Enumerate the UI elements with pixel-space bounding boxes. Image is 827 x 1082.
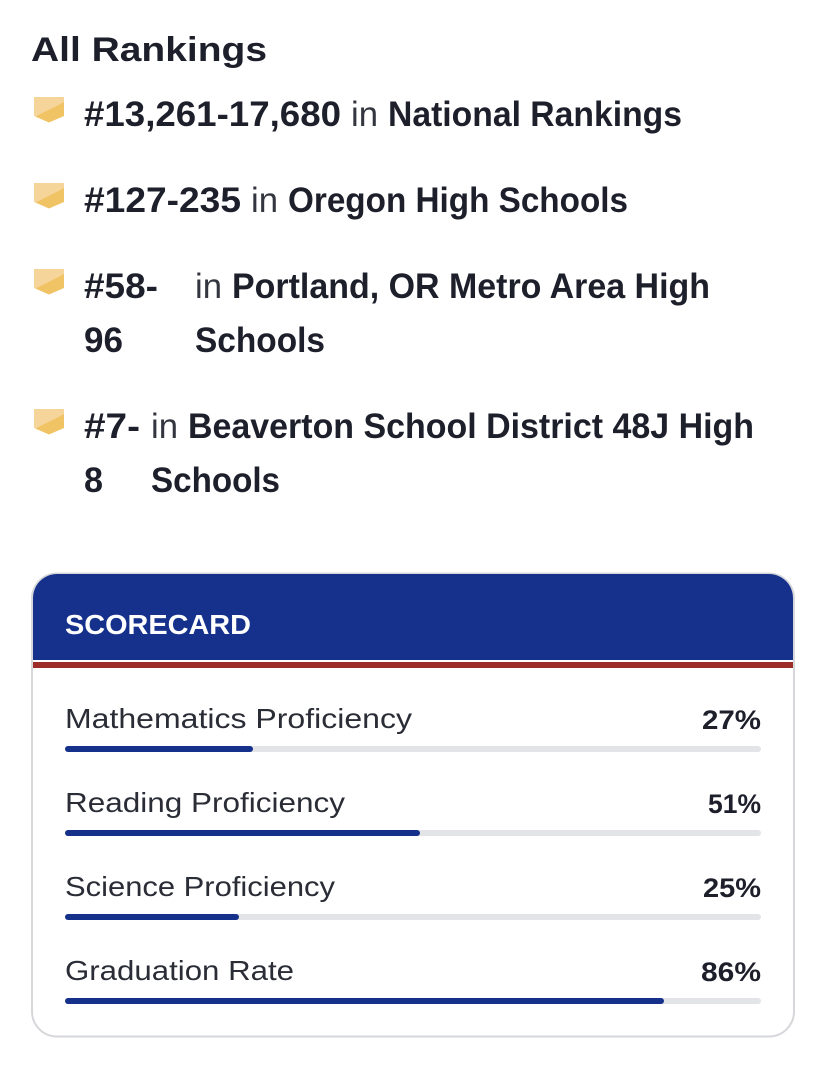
reading bar <box>65 830 761 836</box>
beaverton rank number: #7- <box>84 407 140 446</box>
icon: portland badge <box>34 269 64 294</box>
portland rank number: #58- <box>84 267 158 306</box>
portland rank text second line: Schools <box>195 321 325 360</box>
science label: Science Proficiency <box>65 871 335 902</box>
ranking: beaverton <box>34 407 754 500</box>
row: graduation <box>65 955 761 1004</box>
beaverton rank text second line: Schools <box>151 461 280 500</box>
mathematics label: Mathematics Proficiency <box>65 703 412 734</box>
icon: national badge <box>34 97 64 122</box>
row: reading <box>65 787 761 836</box>
ranking: national <box>34 95 682 134</box>
oregon rank text: #127-235 <box>84 181 241 220</box>
mathematics value: 27% <box>702 705 761 735</box>
title: All Rankings <box>31 31 267 69</box>
row: science <box>65 871 761 920</box>
panel: scorecard <box>32 574 794 1036</box>
graduation value: 86% <box>701 957 761 987</box>
science bar <box>65 914 761 920</box>
card header <box>33 574 793 668</box>
icon: beaverton badge <box>34 409 64 434</box>
row: mathematics <box>65 703 761 752</box>
reading value: 51% <box>708 789 761 819</box>
ranking: oregon <box>34 181 628 220</box>
beaverton rank text: Beaverton School District 48J High <box>188 407 754 446</box>
portland rank number second line: 96 <box>84 321 123 360</box>
mathematics bar <box>65 746 761 752</box>
ranking list <box>34 95 754 500</box>
national rank text: National Rankings <box>388 95 682 134</box>
national rank text: #13,261-17,680 <box>84 95 341 134</box>
portland rank text: Portland, OR Metro Area High <box>232 267 710 306</box>
ranking: portland <box>34 267 710 360</box>
graduation label: Graduation Rate <box>65 955 294 986</box>
oregon rank text: in <box>251 181 278 220</box>
scorecard heading: SCORECARD <box>65 609 251 640</box>
icon: oregon badge <box>34 183 64 208</box>
card background <box>32 574 794 1036</box>
national rank text: in <box>351 95 378 134</box>
graduation bar <box>65 998 761 1004</box>
portland rank text: in <box>195 267 222 306</box>
science value: 25% <box>703 873 761 903</box>
beaverton rank text: in <box>151 407 178 446</box>
oregon rank text: Oregon High Schools <box>288 181 628 220</box>
beaverton rank number second line: 8 <box>84 461 103 500</box>
reading label: Reading Proficiency <box>65 787 345 818</box>
